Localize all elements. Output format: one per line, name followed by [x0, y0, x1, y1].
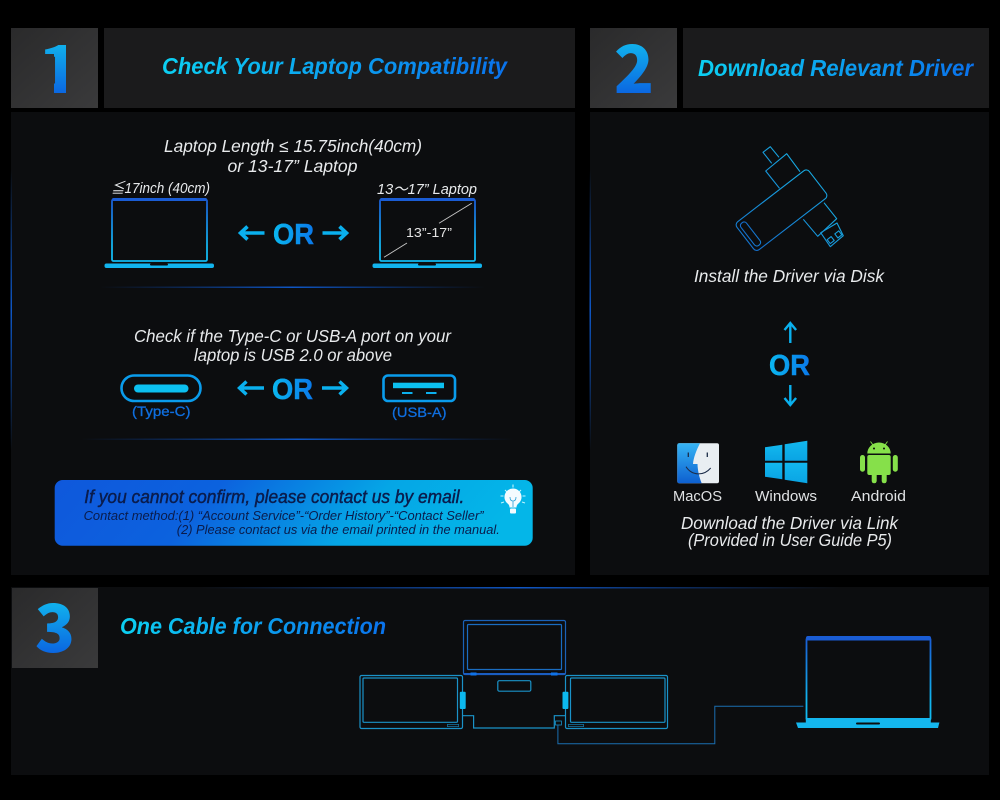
arrows and OR, port row: OR — [272, 374, 313, 406]
icon: connected laptop — [796, 636, 939, 728]
step 3 heading: One Cable for Connection — [120, 613, 386, 639]
label: download via link: Download the Driver via Link — [681, 513, 899, 533]
port check text: Check if the Type-C or USB-A port on your — [134, 326, 452, 346]
label: install via disk: Install the Driver via Disk — [694, 266, 885, 286]
label: Android: Android — [851, 488, 906, 505]
step 3 body panel — [11, 587, 989, 775]
callout: contact by email — [55, 480, 533, 546]
label: MacOS: MacOS — [673, 488, 722, 505]
cable to laptop — [558, 706, 803, 744]
icon: left laptop — [104, 198, 214, 268]
callout: contact by email: If you cannot confirm, please contact us by email. — [84, 486, 464, 507]
icon: macOS finder — [677, 443, 719, 483]
step 1 header bar — [104, 28, 575, 108]
vertical arrows and OR: OR — [769, 350, 810, 382]
step 2 numeral: 2 — [614, 17, 654, 113]
icon: right laptop with diagonal: 13”-17” — [406, 225, 452, 240]
label: 17 inch: ≦17inch (40cm) — [111, 180, 210, 197]
port check text: laptop is USB 2.0 or above — [194, 345, 392, 365]
label: Windows: Windows — [755, 488, 817, 505]
step 2 number box — [590, 28, 677, 108]
callout: contact by email: (2) Please contact us via the email printed in the manual. — [177, 523, 500, 537]
laptop length requirement text: Laptop Length ≤ 15.75inch(40cm) — [164, 136, 422, 156]
step 1 number box — [11, 28, 98, 108]
label: 13 to 17 inch laptop: 13～17” Laptop — [377, 182, 477, 198]
arrows and OR, laptop row — [240, 219, 346, 251]
label: Type-C: (Type-C) — [132, 403, 190, 419]
diagram: triple-screen monitor — [360, 620, 668, 728]
arrows and OR, port row — [240, 374, 346, 406]
step 1 numeral: 1 — [38, 17, 82, 113]
icon: light bulb — [500, 484, 526, 514]
arrows and OR, laptop row: OR — [273, 219, 314, 251]
panel: step 3 — [11, 576, 989, 775]
callout: contact by email: Contact method:(1) “Account Service”-“Order History”-“Contact Seller” — [84, 509, 484, 523]
laptop length requirement text: or 13-17” Laptop — [228, 156, 358, 176]
icon: Windows logo — [765, 441, 807, 483]
icon: Android robot — [860, 442, 898, 483]
panel: step 1 — [10, 17, 575, 575]
label: download via link: (Provided in User Guide P5) — [688, 530, 892, 550]
vertical arrows and OR — [769, 323, 810, 405]
label: USB-A: (USB-A) — [392, 404, 446, 420]
icon: USB flash drive — [735, 147, 843, 252]
step 2 heading: Download Relevant Driver — [698, 55, 974, 81]
step 1 heading: Check Your Laptop Compatibility — [162, 53, 508, 79]
icon: right laptop with diagonal — [372, 198, 482, 268]
laptop length requirement text — [164, 136, 422, 176]
step 2 header bar — [683, 28, 989, 108]
icon: Type-C port — [122, 376, 200, 401]
step 3 numeral: 3 — [35, 576, 75, 672]
step 1 body panel — [11, 112, 575, 575]
label: download via link — [681, 513, 899, 550]
port check text — [134, 326, 452, 365]
icon: USB-A port — [384, 376, 455, 401]
step 3 number box — [12, 588, 98, 668]
step 2 body panel — [590, 112, 989, 575]
panel: step 2 — [590, 17, 989, 575]
